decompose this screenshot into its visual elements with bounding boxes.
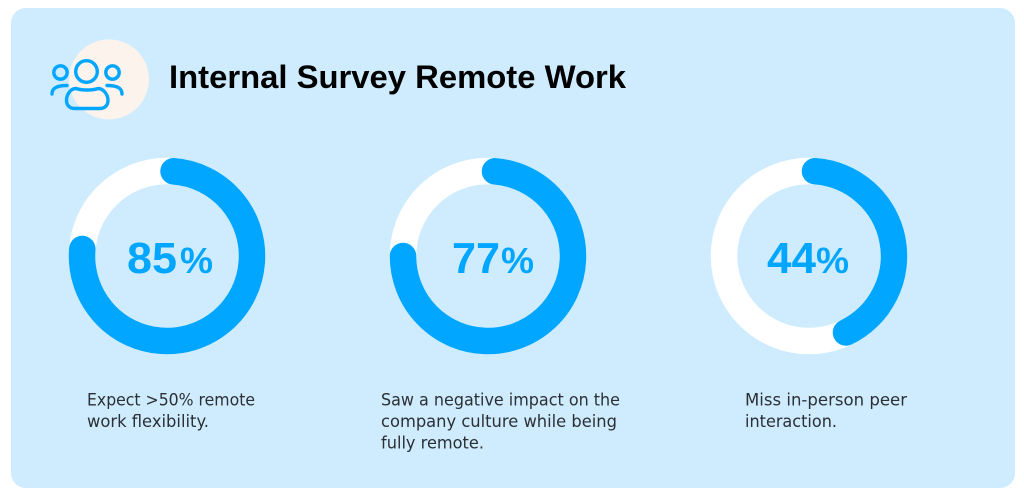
text: 77% caption: Saw a negative impact on the bbox=[381, 390, 620, 410]
donut: 85%: % bbox=[180, 240, 213, 281]
text: 85% caption: work flexibility. bbox=[87, 412, 209, 431]
donut: 77%: 77 bbox=[452, 234, 500, 283]
text: 44% caption bbox=[745, 390, 907, 431]
donut: 44%: % bbox=[816, 240, 849, 281]
donut: 77%: % bbox=[501, 240, 534, 281]
title: Internal Survey Remote Work bbox=[169, 59, 626, 95]
text: 85% caption bbox=[87, 390, 255, 431]
donut: 85%: 85 bbox=[127, 234, 177, 283]
text: 77% caption bbox=[381, 390, 620, 452]
text: 85% caption: Expect >50% remote bbox=[87, 390, 255, 410]
text: 77% caption: company culture while being bbox=[381, 412, 617, 431]
text: 77% caption: fully remote. bbox=[381, 434, 484, 452]
donut: 44%: 44 bbox=[767, 234, 817, 283]
text: 44% caption: interaction. bbox=[745, 412, 837, 431]
donut: 77% bbox=[403, 171, 573, 341]
donut: 44% bbox=[724, 171, 894, 341]
donut: 85% bbox=[82, 171, 252, 341]
icon: people group bbox=[52, 39, 149, 119]
text: 44% caption: Miss in-person peer bbox=[745, 390, 907, 410]
